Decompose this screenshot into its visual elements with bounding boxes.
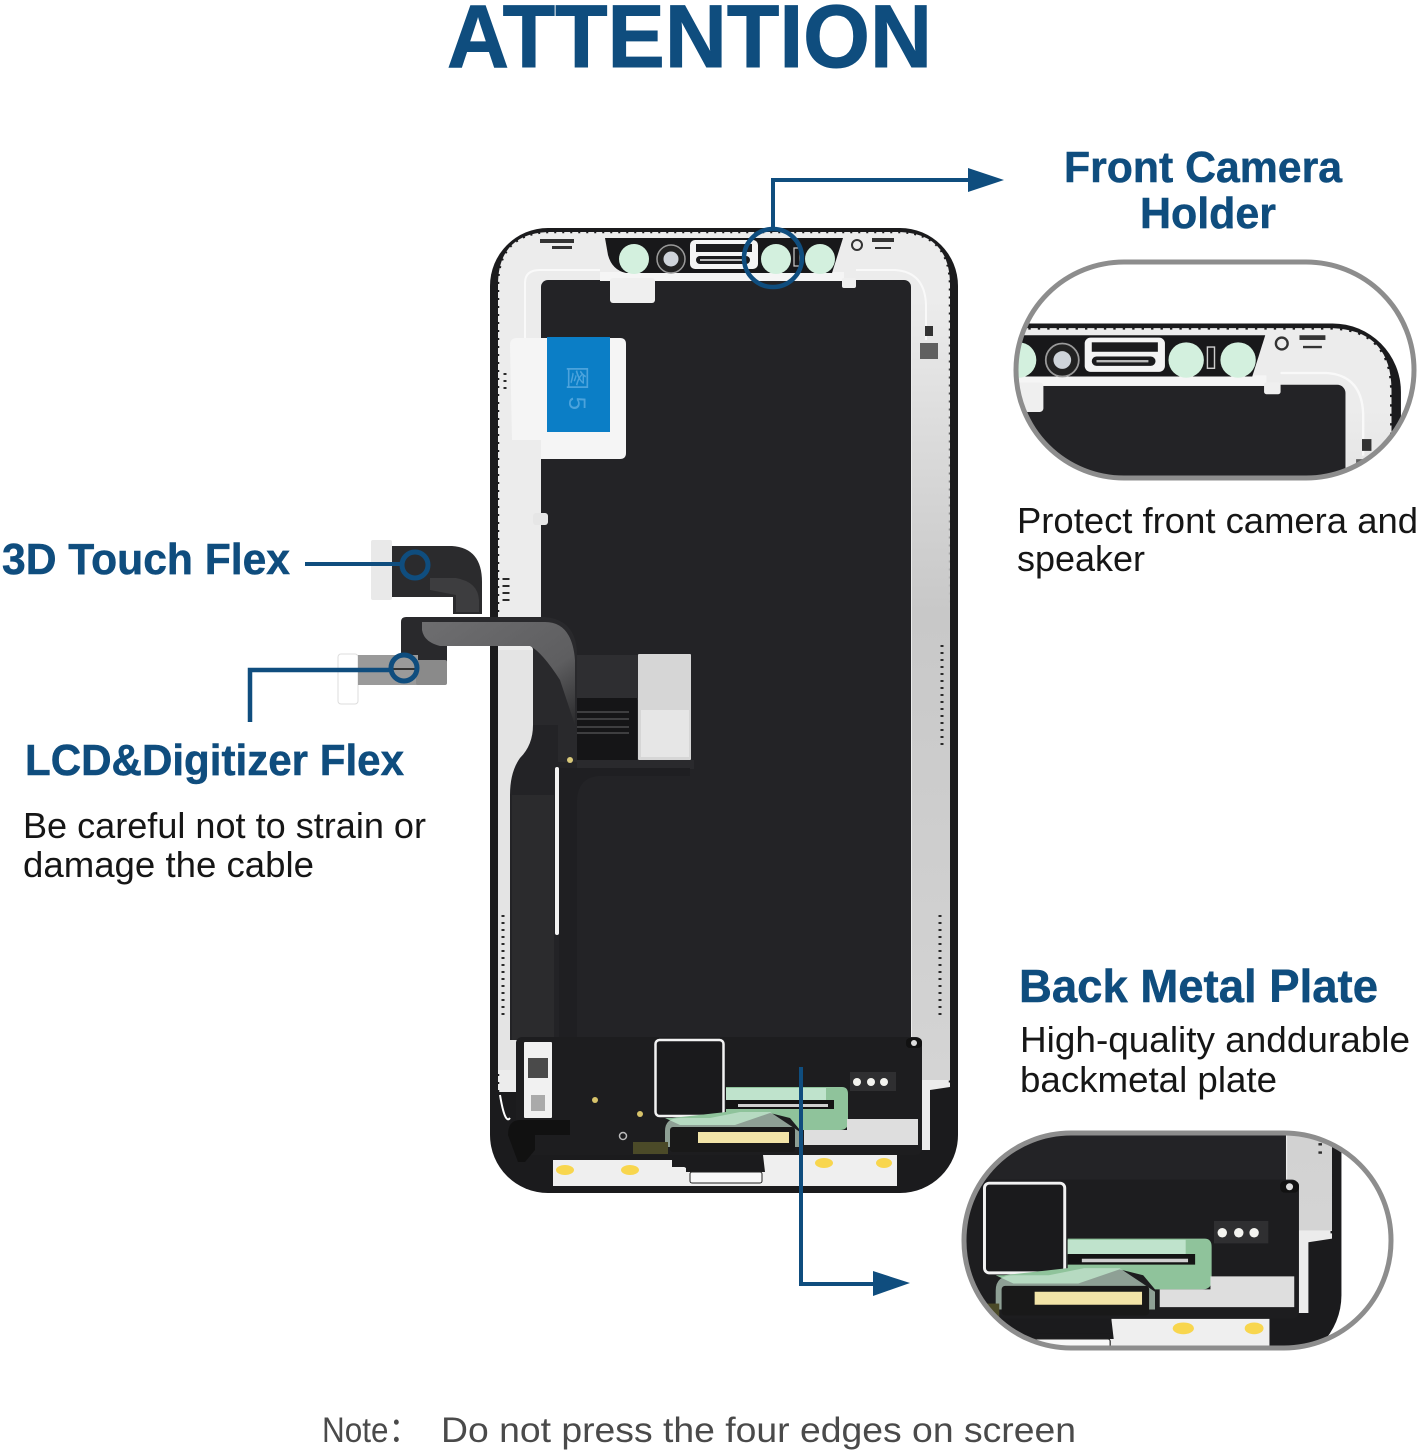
- text: back metal plate description: backmetal plate: [1020, 1059, 1277, 1100]
- sensor notch: [600, 238, 844, 281]
- text: back metal plate description: [1020, 1019, 1410, 1100]
- text: cable warning: Be careful not to strain or: [23, 805, 426, 846]
- bottom metal plates: [553, 1155, 897, 1186]
- heading: front camera holder: [1064, 143, 1343, 238]
- sensor pad left: [619, 244, 649, 274]
- sensor pad middle: [761, 244, 791, 274]
- speaker holder: [690, 240, 758, 269]
- sensor pad right: [805, 244, 835, 274]
- frame inner line: [525, 270, 926, 340]
- green flex: [660, 1087, 848, 1130]
- left flex strip: [510, 725, 690, 1040]
- top frame marks: [540, 238, 938, 359]
- callout: 3D touch flex leader: [305, 552, 428, 578]
- side speaker holes: [503, 373, 942, 1015]
- text: front camera description: speaker: [1017, 538, 1145, 579]
- blue sticker: 图 5: [563, 366, 590, 410]
- callout: back metal plate leader: [801, 1067, 910, 1296]
- tab: [533, 513, 548, 525]
- frame tabs: [610, 278, 655, 303]
- heading: front camera holder: Front Camera: [1064, 143, 1343, 192]
- text: front camera description: [1017, 500, 1418, 579]
- yellow strip: [698, 1132, 789, 1143]
- phone screen illustration: [338, 228, 958, 1193]
- text: back metal plate description: High-quality anddurable: [1020, 1019, 1410, 1060]
- camera lens: [657, 245, 685, 273]
- inner dark panel: [541, 280, 911, 1050]
- inset: back metal plate zoom: [962, 1130, 1394, 1350]
- callout: front camera holder leader: [744, 168, 1004, 287]
- note: Do not press the four edges on screen: [441, 1411, 1076, 1450]
- heading: back metal plate: Back Metal Plate: [1019, 960, 1378, 1012]
- contact dots: [850, 1072, 896, 1091]
- text: cable warning: damage the cable: [23, 844, 314, 885]
- blue sticker: [510, 337, 626, 459]
- note: Note：: [322, 1411, 420, 1450]
- heading: 3D touch flex: 3D Touch Flex: [2, 535, 291, 584]
- heading: front camera holder: Holder: [1140, 189, 1276, 238]
- bottom flex board: [500, 1037, 922, 1162]
- QR label: [524, 1042, 552, 1118]
- connector bracket: [575, 654, 694, 769]
- outer black body: [490, 228, 958, 1193]
- callout: LCD digitizer flex leader: [250, 655, 417, 722]
- metal plate: [804, 1119, 918, 1145]
- text: cable warning: [23, 805, 426, 885]
- heading: LCD digitizer flex: LCD&Digitizer Flex: [25, 736, 405, 785]
- inset: front camera zoom: [1014, 260, 1416, 480]
- LCD digitizer flex: [338, 617, 577, 770]
- 3D touch flex: [371, 540, 482, 614]
- square plate: [656, 1040, 724, 1116]
- metal frame: [498, 232, 950, 1150]
- solder points: [592, 1097, 598, 1103]
- text: front camera description: Protect front camera and: [1017, 500, 1418, 541]
